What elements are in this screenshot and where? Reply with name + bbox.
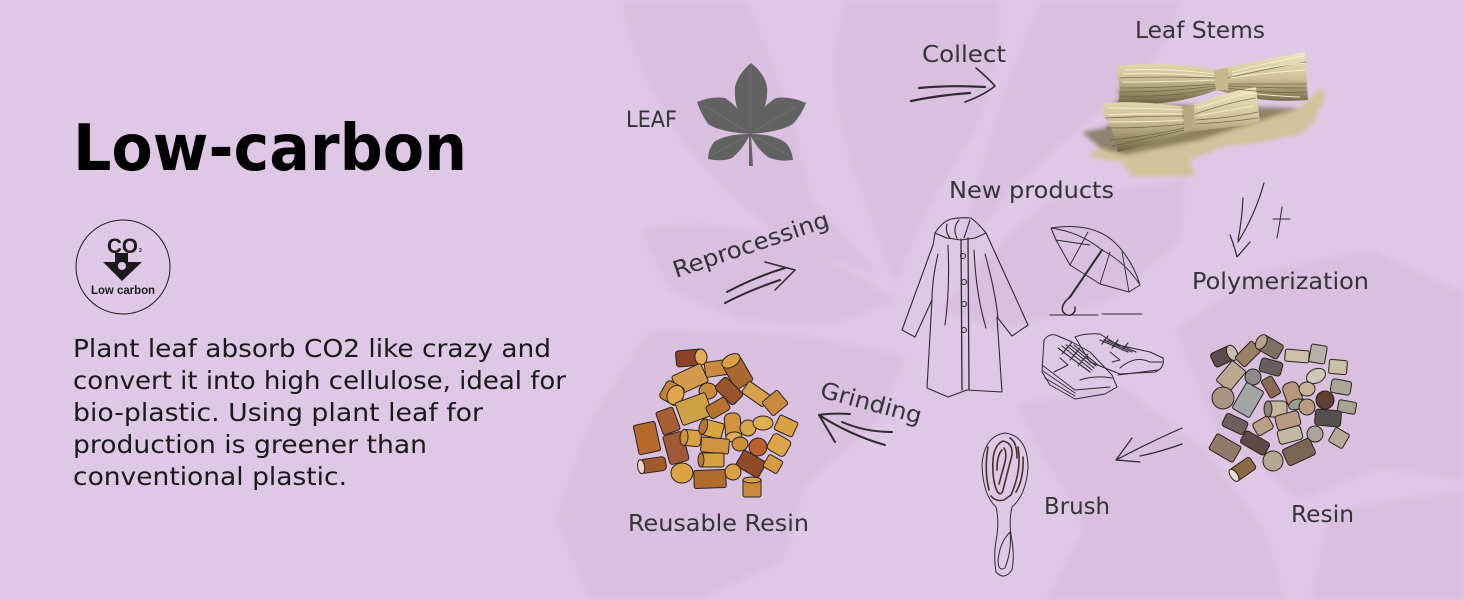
- icon: CO2 low carbon badge: 2: [139, 248, 142, 254]
- icon: umbrella: [1050, 226, 1142, 315]
- body text: Plant leaf absorb CO2 like crazy and: [73, 334, 551, 363]
- arrow: reprocessing: [725, 262, 795, 303]
- label: Leaf Stems: Leaf Stems: [1135, 18, 1265, 44]
- label: New products: New products: [949, 178, 1114, 204]
- label: LEAF: LEAF: [626, 108, 677, 133]
- icon: CO2 low carbon badge: Low carbon: [91, 285, 155, 297]
- body text: [73, 334, 567, 491]
- body text: bio-plastic. Using plant leaf for: [73, 398, 484, 427]
- icon: CO2 low carbon badge: CO: [107, 235, 138, 258]
- arrow: collect: [911, 68, 995, 102]
- label: Reprocessing: Reprocessing: [670, 207, 832, 284]
- label: Polymerization: Polymerization: [1192, 269, 1369, 295]
- image: resin pellets: [1208, 333, 1357, 483]
- label: Brush: Brush: [1044, 494, 1110, 520]
- image: reusable resin pellets: [633, 348, 798, 497]
- arrow: to polymerization: [1230, 183, 1290, 257]
- icon: hair brush: [982, 433, 1028, 576]
- icon: CO2 low carbon badge: [76, 220, 170, 314]
- label: Collect: Collect: [922, 42, 1006, 68]
- icon: raincoat: [902, 218, 1028, 397]
- label: Grinding: Grinding: [817, 378, 925, 430]
- icon: chestnut leaf: [697, 63, 806, 166]
- label: Resin: Resin: [1291, 502, 1354, 528]
- body text: conventional plastic.: [73, 462, 347, 491]
- background leaf silhouette: [555, 0, 1464, 600]
- body text: convert it into high cellulose, ideal for: [73, 366, 567, 395]
- body text: production is greener than: [73, 430, 427, 459]
- image: leaf stem bundles: [1082, 52, 1326, 176]
- title: Low-carbon: [73, 112, 467, 186]
- arrow: to brush: [1116, 428, 1182, 462]
- arrow: grinding: [819, 414, 892, 445]
- icon: sneakers: [1042, 334, 1163, 399]
- label: Reusable Resin: Reusable Resin: [628, 511, 809, 537]
